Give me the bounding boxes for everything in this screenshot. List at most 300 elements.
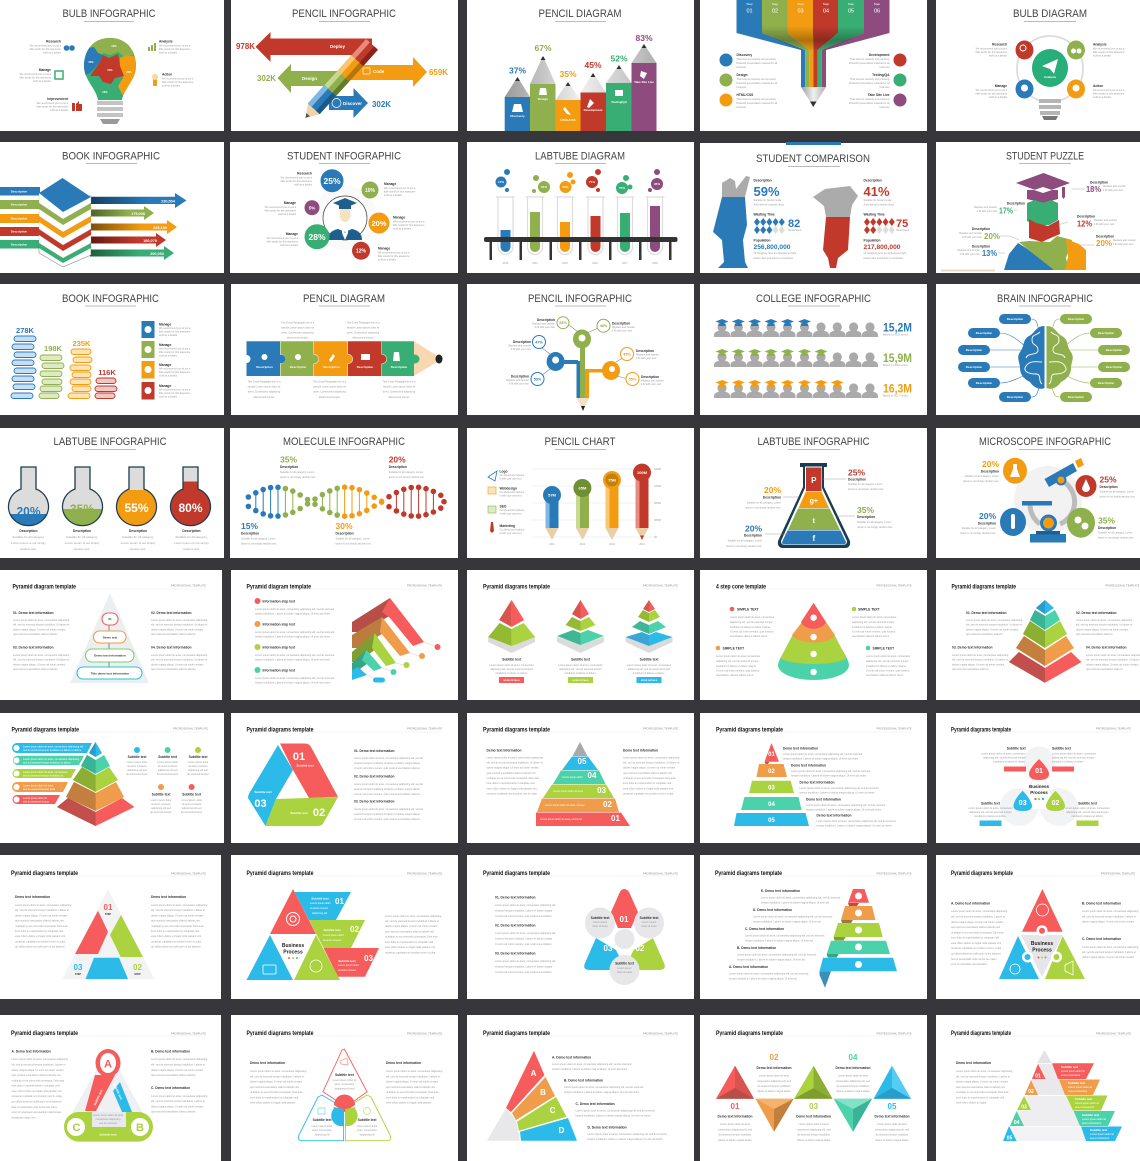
right pills: Description: [1068, 395, 1084, 399]
microscope: [1014, 458, 1084, 542]
side text: 03. Demo text information: [952, 646, 992, 650]
flag trapezoids: Lorem ipsum dolor sit: [1090, 1133, 1114, 1136]
percentage bubbles: 20%: [371, 219, 387, 228]
panel: 4 step cone: PROFESSIONAL TEMPLATE: [876, 584, 912, 588]
layered pyramid: [1009, 600, 1082, 683]
student rows: [714, 319, 878, 398]
right pills: Description: [1098, 381, 1114, 385]
right text: irure dolor in reprehenderit in voluptate velit: [386, 1096, 434, 1100]
arrow labels: Design: [302, 76, 317, 81]
subtitle items: [126, 747, 209, 814]
cone text: Lorem ipsum dolor sit amet, consectetur: [730, 616, 775, 619]
panel: stepped flag pyramid: [936, 1015, 1140, 1161]
labels: little words for this awesome: [378, 255, 410, 258]
left text: quis nostrud exercitation ullamco laboris nisi: [12, 1074, 61, 1077]
cone text: [716, 607, 911, 677]
percentages: [509, 33, 653, 79]
step labels: 06: [874, 8, 880, 14]
left labels: Research: [46, 40, 61, 44]
right stats: Suitable for Social media: [864, 199, 892, 202]
step list: Lorem ipsum dolor sit amet, consectetur adipiscing elit, sed do eiusmod: [255, 608, 335, 611]
captions and buttons: adipiscing elit, sed do eiusmod tempor: [490, 668, 533, 671]
left labels: [20, 40, 82, 112]
step text: A. Demo text information: [729, 965, 768, 969]
title: BOOK INFOGRAPHIC: [62, 150, 160, 162]
triangles: Business: [282, 943, 304, 949]
side text: dolore magna aliqua. Ut enim ad minim veniam,: [1086, 664, 1139, 666]
tree labels: Replace and reorder: [508, 344, 531, 348]
right stats: 75: [896, 218, 908, 230]
step list: Information step text: [262, 600, 296, 604]
panel: pencil chart: [467, 428, 694, 558]
heading: 4 step cone template: [716, 584, 766, 590]
trapezoid callouts: 01: [335, 897, 344, 906]
panel: student infographic: [230, 142, 458, 273]
percentage rings: 53%: [534, 377, 542, 381]
banners: Lorem ipsum dolor sit amet, consectetur: [23, 771, 68, 774]
subtitle items: sit amet consecte: [188, 765, 208, 768]
left text: A. Demo text information: [12, 1050, 51, 1054]
right text: Lorem ipsum dolor sit amet, consectetur adipiscing: [1082, 910, 1139, 913]
right text: dolore magna aliqua. Ut enim ad minim veniam: [151, 914, 203, 918]
left labels: little words for this awesome: [30, 48, 62, 51]
triangle diagram: 01: [104, 903, 113, 912]
left text: [12, 1050, 68, 1120]
upper captions: labore et dolore magna aliqua: [836, 1090, 870, 1093]
dna labels: Description: [280, 465, 298, 469]
flask captions: Lorem ipsum is not simply: [11, 541, 46, 545]
left stats: Hours/week: [788, 229, 802, 232]
outlined pyramid: Demo text: [103, 636, 117, 640]
panel: pyramid outlined pills: PROFESSIONAL TEMPLATE: [171, 584, 206, 588]
step text: Demo text information: [783, 746, 818, 750]
intro text right: elit, sed do eiusmod tempor incididunt. Ut labore et: [623, 762, 680, 764]
chart grid: [532, 467, 662, 539]
puzzle labels: Replace and reorder: [1113, 239, 1136, 242]
subtitle items: Subtitle text: [158, 755, 178, 759]
puzzle labels: 13%: [982, 249, 997, 258]
captions above: sample Lorem ipsum dolor sit: [347, 326, 380, 330]
labels: stuff as a details: [294, 184, 313, 186]
bubbles: [496, 169, 663, 194]
step text: tempor incididunt. Labore et dolore magna aliqua. Ut enim ad minim: [806, 808, 881, 812]
heading: Pyramid diagrams template: [483, 726, 550, 734]
step list: Lorem ipsum dolor sit amet, consectetur adipiscing elit, sed do eiusmod: [255, 631, 335, 634]
strip text: Lorem ipsum dolor sit amet, consectetur adipiscing elit, sed do eiusmod: [552, 1063, 632, 1066]
captions above: amet, Consectetur adipiscing: [281, 332, 314, 334]
lower captions: labore et dolore magna aliqua: [875, 1139, 909, 1142]
labels: little words for this awesome: [1093, 51, 1125, 54]
captions and buttons: adipiscing elit, sed do eiusmod tempor: [559, 668, 602, 671]
strip text: D. Demo text information: [588, 1126, 627, 1130]
microscope labels: [960, 459, 1136, 540]
text list: Ut enim ad minim veniam, quis nostrud exercitation: [495, 943, 552, 946]
left stats: Population: [754, 238, 771, 242]
heading: Pyramid diagrams template: [952, 584, 1016, 590]
right stats: 41%: [864, 184, 890, 199]
left text: dolore magna aliqua. Ut enim ad minim veniam,: [13, 628, 66, 632]
right text: Lorem ipsum dolor sit amet, consectetur adipiscing: [151, 619, 208, 622]
book legend: stuff as a details: [159, 374, 178, 378]
right stats: Population: [864, 238, 881, 242]
labels: little words for this awesome: [267, 240, 299, 244]
flask captions: Lorem ipsum is not simply: [121, 541, 156, 545]
arrow labels: Deploy: [330, 44, 346, 49]
pencil columns: 2011: [549, 543, 555, 546]
puzzle labels: it fill with your own: [1094, 223, 1115, 226]
heading: Pyramid diagrams template: [11, 870, 78, 877]
text list: 02. Demo text information: [495, 924, 536, 928]
captions above: alteszumed tempor: [287, 336, 308, 340]
ribbon text: Ut enim ad minim veniam, quis nostrud exercitation ullamco: [354, 818, 421, 821]
left pills: Description: [976, 331, 992, 335]
puzzle labels: Replace and reorder: [1094, 219, 1117, 222]
flask labels: 20%: [745, 524, 762, 534]
ribbon triangle: Subtitle text: [296, 764, 314, 768]
intro text left: quis nostrud exercitation ullamco laboris nisi: [486, 772, 536, 775]
title: PENCIL DIAGRAM: [303, 293, 385, 305]
upper captions: 04: [849, 1053, 858, 1062]
title: MICROSCOPE INFOGRAPHIC: [979, 436, 1111, 448]
cone text: incididunt ut labore et dolore magna: [866, 665, 906, 668]
microscope labels: Ipsum is not simply random text.: [960, 532, 996, 535]
labels: stuff as a details: [393, 228, 412, 230]
right text: Lorem ipsum dolor sit amet, consectetur adipiscing: [386, 1070, 443, 1073]
strip pyramid: A: [531, 1069, 537, 1078]
left text: error sit voluptatem accusantium: [951, 963, 987, 966]
tree labels: Description: [612, 322, 630, 326]
trapezoid callouts: Lorem ipsum dolor: [338, 964, 359, 967]
trapezoid callouts: adipiscing elit: [312, 912, 327, 915]
chart grid: 00: [654, 535, 658, 539]
labels: We recommend you to put a: [265, 206, 297, 209]
labels: We recommend you to put a: [378, 252, 410, 254]
flask labels: 25%: [848, 468, 865, 478]
right labels: little words for this awesome: [162, 81, 194, 84]
flask labels: Ipsum is not simply random text.: [726, 545, 762, 548]
right labels: Analysis: [159, 40, 173, 44]
right text: [151, 895, 208, 948]
right text: elit, sed do eiusmod tempor incididunt. Labore et: [1082, 916, 1136, 918]
panel: microscope infographic: [936, 428, 1140, 558]
row values: Based on 2015 survey: [883, 334, 909, 336]
labels: little words for this awesome: [976, 51, 1008, 54]
puzzle pencil: Description: [357, 365, 373, 369]
bubbles: 71%: [589, 180, 595, 184]
left text: ut aliquip ex ea commodo consequat. Duis aute: [250, 1091, 303, 1094]
captions and buttons: Lorem ipsum dolor sit amet, consectetur: [627, 664, 671, 667]
tree labels: Replace and reorder: [636, 354, 659, 356]
row values: Based on 2016 survey: [883, 364, 909, 367]
book legend: Manage: [159, 322, 171, 326]
panel: bulb diagram: [936, 0, 1140, 131]
flask captions: random text.: [183, 547, 200, 551]
left text: [956, 1061, 1013, 1104]
right text: B. Demo text information: [151, 1050, 190, 1054]
labels: We recommend you to put a: [976, 48, 1008, 50]
labels: We recommend you to put a: [384, 187, 416, 190]
step labels: 04: [823, 8, 829, 14]
intro text right: ut aliquip ex ea commodo consequat. Duis aute: [623, 777, 676, 780]
left stats: 82: [788, 218, 800, 230]
flag trapezoids: Subtitle text: [1075, 1097, 1092, 1101]
step text: Lorem ipsum dolor sit amet, consectetur adipiscing elit, sed do eiusmod: [800, 787, 879, 790]
step text: Lorem ipsum dolor sit amet, consectetur adipiscing elit, sed do eiusmod: [791, 770, 871, 773]
left description tabs: Description: [11, 216, 27, 220]
right text: dolore magna aliqua. Ut enim ad minim veniam,: [151, 664, 204, 666]
title: STUDENT INFOGRAPHIC: [287, 150, 401, 162]
dna strand: [248, 487, 444, 516]
outlined triangles: Subtitle text: [335, 1073, 355, 1077]
microscope labels: 35%: [1098, 516, 1115, 526]
left stats: before their procedure is completed: [754, 257, 793, 260]
percentage rings: 45%: [623, 352, 631, 356]
left text: irure dolor in reprehenderit in voluptate velit: [951, 936, 999, 940]
captions above: amet, Consectetur adipiscing: [347, 332, 380, 334]
labels: stuff as a details: [384, 194, 403, 197]
petal diagram: dolor sit amet: [592, 925, 608, 928]
right pills: [1060, 314, 1130, 402]
percentages: 37%: [509, 66, 526, 76]
right text: Lorem ipsum dolor sit amet, consectetur adipiscing: [385, 915, 442, 918]
dna labels: Suitable for all category, Lorem: [241, 538, 275, 540]
right pills: Description: [1068, 317, 1084, 321]
intro text right: dolore magna aliqua. Ut enim ad minim veniam: [623, 766, 675, 770]
pencil columns: [543, 464, 651, 546]
right stats: Description: [864, 178, 882, 182]
abc triangle: Subtitle text: [99, 1132, 117, 1136]
right stats: Of shopping carts are abandoned right: [864, 252, 906, 255]
side text: Lorem ipsum dolor sit amet, consectetur adipiscing: [952, 654, 1009, 657]
ribbon text: eiusmod tempor incididunt ut labore et dolore magna aliqua: [354, 813, 420, 816]
title: STUDENT PUZZLE: [1006, 150, 1084, 162]
intro text right: esse cillum dolore eu fugiat nulla pariatur sint: [623, 788, 673, 790]
subtitle items: adipiscing elit sed: [182, 807, 202, 810]
subtitle items: Lorem ipsum dolor: [188, 761, 209, 764]
microscope labels: Ipsum is not simply random text.: [963, 480, 999, 483]
left text: 01. Demo text information: [13, 611, 54, 615]
years: 2017: [622, 262, 628, 265]
labels: Research: [297, 172, 312, 176]
flask labels: 35%: [857, 505, 874, 515]
cone text: Ut enim ad minim veniam, quis nostrud: [730, 630, 774, 634]
upper captions: consectetur adipiscing elit, sed: [757, 1080, 792, 1083]
dna labels: Ipsum is not simply random text.: [241, 542, 277, 546]
trapezoid callouts: sit amet consect: [323, 939, 341, 942]
heading: Pyramid diagrams template: [483, 870, 550, 877]
panel: interlocked triangle ABC: [0, 1015, 221, 1161]
percentages: 52%: [610, 54, 628, 64]
tree labels: it fill with your own: [612, 330, 633, 332]
flask labels: Ipsum is not simply random text.: [857, 526, 893, 529]
book legend: little words for this awesome: [159, 330, 191, 334]
subtitle items: do eiusmod tempor: [126, 773, 148, 776]
petal diagram: Lorem ipsum: [617, 967, 632, 970]
arrow labels: Code: [373, 69, 385, 74]
left items: Powerful presentation material for all: [736, 102, 778, 105]
lower captions: Demo text information: [874, 1114, 910, 1118]
step labels: Step: [797, 2, 804, 6]
outlined triangles: amet, consectetur: [312, 1129, 332, 1132]
book legend: stuff as a details: [159, 334, 178, 337]
pencil bars: Take Site Live: [634, 80, 654, 84]
3d stair pyramid: [352, 598, 424, 680]
pyramid two: [557, 600, 604, 653]
percentage bubbles: [304, 169, 390, 260]
side text: quis nostrud exercitation ullamco.: [966, 633, 1003, 636]
step text: [783, 746, 896, 828]
right labels: We recommend you to put a: [162, 78, 194, 80]
heading: Pyramid diagrams template: [483, 1030, 550, 1037]
lower captions: do eiusmod tempor incididunt: [797, 1134, 830, 1136]
heading: Pyramid diagrams template: [12, 726, 79, 734]
fold pyramid: [820, 889, 897, 988]
panel: bulb infographic: [0, 0, 224, 131]
flask 20 percent: 20%: [16, 504, 41, 518]
upper captions: Lorem ipsum dolor sit amet: [759, 1074, 789, 1078]
right items: Powerful presentation material for all: [849, 102, 890, 105]
banners: [12, 743, 92, 804]
ribbon text: eiusmod tempor incididunt ut labore et dolore magna aliqua: [354, 788, 420, 791]
petal diagram: 02: [636, 944, 645, 953]
stack values: 116K: [98, 368, 116, 377]
labels: little words for this awesome: [393, 224, 425, 227]
right stats: And internet business thing: [864, 204, 894, 206]
strip pyramid: C: [550, 1106, 556, 1115]
petal diagram: dolor sit amet: [617, 971, 632, 974]
left text: qui officia deserunt mollit anim id est laborum: [12, 1100, 61, 1104]
title: BRAIN INFOGRAPHIC: [997, 293, 1093, 305]
drops captions: [968, 746, 1110, 826]
captions above: This Great Paragraph line is a: [346, 322, 380, 324]
right labels: little words for this awesome: [159, 48, 191, 51]
heading: Pyramid diagram template: [12, 584, 76, 590]
tree labels: it fill with your own: [509, 382, 530, 386]
cone text: exercitation ullamco laboris nisi ut: [866, 674, 904, 677]
captions below: sample Lorem ipsum dolor sit: [248, 386, 281, 388]
triangle diagram: STEP: [75, 973, 82, 976]
pyramid bands: Lorem ipsum dolor sit amet, consectet: [540, 818, 583, 821]
abc triangle: Subtitle text: [112, 1083, 123, 1100]
outlined triangles: Subtitle text: [313, 1118, 332, 1122]
triangles diagram: Process: [1032, 948, 1052, 954]
stacked pyramid: 03: [768, 786, 775, 792]
drops captions: Subtitle text: [1007, 746, 1026, 750]
side text: 02. Demo text information: [1076, 611, 1116, 615]
step text: Lorem ipsum dolor sit amet, consectetur adipiscing elit, sed do eiusmod: [729, 972, 809, 976]
left items: That internet carefully and precisely: [736, 58, 777, 61]
right text: elit, sed do eiusmod tempor incididunt. Ut labore et: [151, 624, 208, 626]
right text: irure dolor in reprehenderit in voluptate velit: [385, 941, 433, 944]
years: 2016: [592, 262, 598, 265]
right text: ut aliquip ex ea commodo consequat. Duis aute: [385, 936, 438, 938]
left description tabs: Description: [11, 190, 27, 194]
abc triangle: B: [136, 1122, 144, 1134]
labels: Analysis: [1093, 42, 1107, 46]
left text: Demo text information: [956, 1061, 991, 1065]
left labels: stuff as a details: [50, 109, 69, 112]
dna labels: Suitable for all category, Lorem: [336, 538, 370, 540]
upper captions: [756, 1053, 871, 1093]
outlined triangles: [298, 1049, 391, 1141]
puzzle labels: Description: [1090, 180, 1108, 184]
text list: 03. Demo text information: [495, 952, 536, 956]
right text: C. Demo text information: [151, 1086, 190, 1090]
heading: Pyramid diagrams template: [716, 1030, 783, 1037]
upper captions: Demo text information: [756, 1066, 792, 1070]
petal diagram: Subtitle text: [591, 916, 610, 920]
upper captions: Demo text information: [836, 1066, 870, 1070]
left text: esse cillum dolore eu fugiat nulla pariatur sint: [951, 942, 1001, 945]
step text: Lorem ipsum dolor sit amet, consectetur adipiscing elit, sed do eiusmod: [753, 916, 833, 918]
left text: esse cillum dolore eu fugiat nulla pariatur sint: [15, 935, 65, 938]
left items: Powerful presentation material for all: [736, 62, 778, 65]
intro text left: esse cillum dolore eu fugiat nulla pariatur sint: [486, 788, 537, 790]
intro text left: irure dolor in reprehenderit in voluptate velit: [486, 782, 535, 785]
captions below: alteszumed tempor: [388, 396, 410, 399]
outlined triangles: adipiscing elit sed: [335, 1088, 355, 1090]
subtitle items: do eiusmod tempor: [187, 773, 209, 776]
right text: Lorem ipsum dolor sit amet, consectetur adipiscing: [1082, 946, 1139, 949]
legend items: [488, 470, 525, 535]
panel: pyramid with fold: [700, 855, 927, 999]
title: MOLECULE INFOGRAPHIC: [283, 436, 405, 448]
dna labels: Description: [336, 532, 354, 536]
flask 35 percent: [60, 467, 105, 526]
trapezoid callouts: [294, 892, 379, 977]
dna labels: Ipsum is not simply random text.: [336, 542, 372, 546]
right items: Development: [869, 53, 890, 57]
subtitle items: adipiscing elit sed: [188, 769, 208, 772]
puzzle pencil: Description: [290, 365, 306, 369]
subtitle items: Subtitle text: [182, 792, 202, 796]
puzzle labels: it fill with your own: [1103, 189, 1124, 192]
right items: [849, 53, 906, 109]
pencil columns: 100M: [637, 470, 648, 475]
pyramid bands: Lorem ipsum dolor: [562, 776, 583, 779]
flask captions: [11, 529, 209, 551]
left text: elit, sed do eiusmod tempor incididunt. Ut labore et: [13, 658, 70, 662]
ribbon triangle: 01: [293, 751, 305, 763]
panel: triangle three steps: PROFESSIONAL TEMPLATE: [171, 872, 206, 876]
drops diagram: Business: [1029, 784, 1049, 789]
stacked pyramid: [734, 743, 809, 826]
subtitle items: do eiusmod tempor: [150, 811, 172, 814]
left text: qui officia deserunt mollit anim id est laborum: [15, 946, 65, 948]
left text: [13, 611, 70, 671]
heading: Pyramid diagrams template: [716, 726, 783, 734]
abc triangle: Subtitle text: [93, 1089, 104, 1106]
subtitle items: sit amet consecte: [182, 803, 202, 806]
side text: elit, sed do eiusmod tempor incididunt. Ut labore et: [966, 624, 1023, 626]
flag trapezoids: [1052, 1063, 1122, 1141]
left text: Lorem ipsum dolor sit amet, consectetur adipiscing: [951, 910, 1008, 913]
right text: quis nostrud exercitation ullamco laboris nisi: [386, 1086, 435, 1089]
left labels: Manage: [39, 68, 51, 72]
title: STUDENT COMPARISON: [756, 153, 870, 165]
cone text: exercitation ullamco laboris nisi ut: [716, 674, 754, 677]
puzzle labels: 17%: [999, 206, 1013, 216]
microscope labels: 25%: [1100, 474, 1117, 484]
legend items: Go ahead and replace: [500, 474, 525, 477]
panel: labtube infographic flask: [700, 428, 927, 558]
left labels: stuff as a details: [33, 80, 52, 83]
arrow labels: [236, 42, 448, 109]
text list: Ut enim ad minim veniam, quis nostrud exercitation: [495, 971, 552, 974]
puzzle pencil: [246, 341, 442, 376]
left text: quis nostrud exercitation ullamco laboris nisi: [250, 1086, 299, 1089]
left text: dolore magna aliqua. Ut enim ad minim veniam: [250, 1080, 302, 1084]
